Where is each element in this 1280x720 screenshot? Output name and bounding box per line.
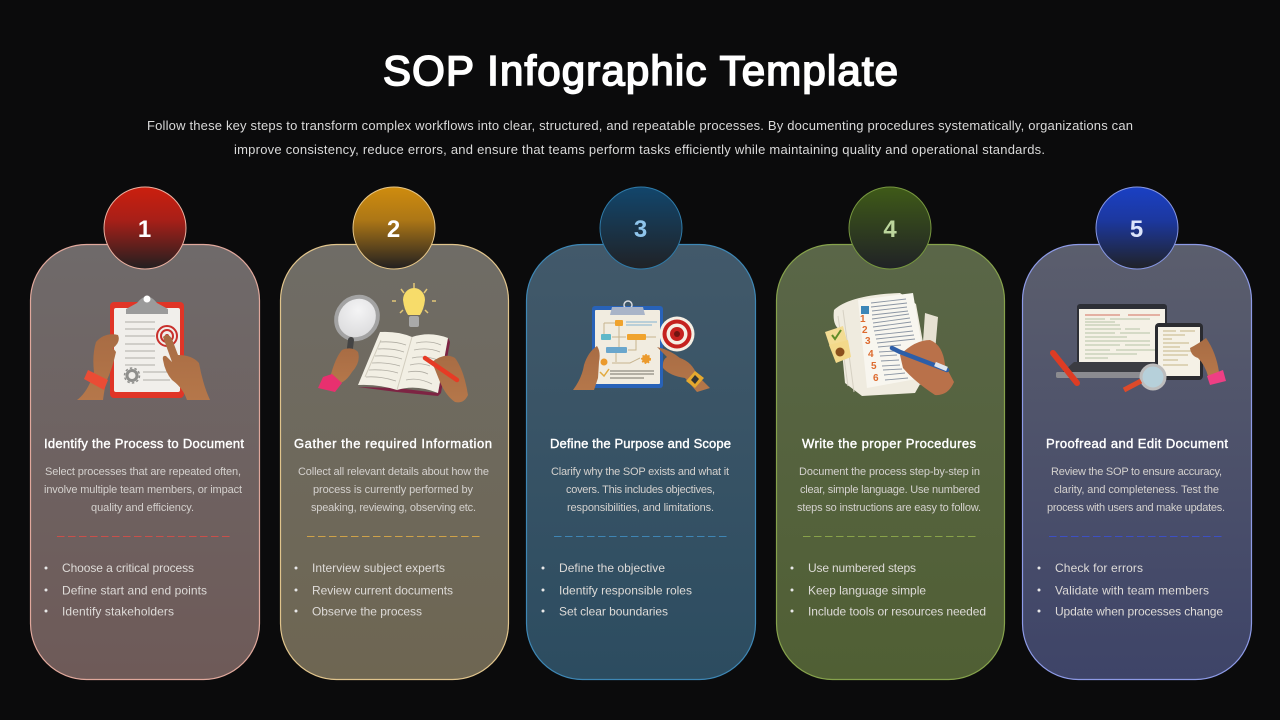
- description: clear, simple language. Use numbered: [800, 484, 980, 496]
- card 1 background: [30, 244, 260, 680]
- heading: Identify the Process to Document: [44, 436, 244, 451]
- number badge 2: [353, 187, 435, 269]
- bullet list: Check for errors: [1055, 561, 1143, 575]
- description: Document the process step-by-step in: [799, 466, 980, 478]
- subtitle text block: [147, 118, 1133, 157]
- number badge 5: [1096, 187, 1178, 269]
- bullet list: Choose a critical process: [62, 561, 194, 575]
- card 5 background: [1022, 244, 1252, 680]
- subtitle text block: Follow these key steps to transform complex workflows into clear, structured, and repeatable processes. By documenting procedures systematically, organizations can: [147, 118, 1133, 133]
- bullet list: Use numbered steps: [808, 561, 916, 575]
- panel: step 2: [280, 187, 508, 680]
- description: responsibilities, and limitations.: [567, 502, 714, 514]
- bullet list: Keep language simple: [808, 584, 926, 598]
- bullet list: [542, 561, 692, 618]
- description: [44, 466, 242, 514]
- divider: [1049, 536, 1223, 538]
- description: covers. This includes objectives,: [566, 484, 715, 496]
- description: [298, 466, 489, 514]
- description: [551, 466, 729, 514]
- bullet list: Include tools or resources needed: [808, 604, 986, 618]
- description: Collect all relevant details about how the: [298, 466, 489, 478]
- number badge 3: 3: [634, 216, 647, 243]
- number badge 5: 5: [1130, 216, 1143, 243]
- divider: [57, 536, 231, 538]
- bullet list: [790, 561, 986, 618]
- divider: [554, 536, 728, 538]
- description: quality and efficiency.: [91, 502, 194, 514]
- card 4 background: [776, 244, 1004, 680]
- description: process is currently performed by: [313, 484, 474, 496]
- description: clarity, and completeness. Test the: [1054, 484, 1219, 496]
- bullet list: [294, 561, 453, 618]
- panel: step 5: [1022, 187, 1252, 680]
- number badge 1: 1: [138, 216, 151, 243]
- bullet list: Review current documents: [312, 584, 453, 598]
- description: steps so instructions are easy to follow.: [797, 502, 981, 514]
- icon: laptop, tablet, magnifier and pen: [1053, 304, 1226, 390]
- card 3 background: [526, 244, 756, 680]
- number badge 4: 4: [883, 216, 897, 243]
- bullet list: Set clear boundaries: [559, 604, 668, 618]
- description: [797, 466, 981, 514]
- description: involve multiple team members, or impact: [44, 484, 242, 496]
- icon: numbered document stack with pen: 2: [862, 325, 868, 336]
- heading: Define the Purpose and Scope: [550, 436, 731, 451]
- heading: Proofread and Edit Document: [1046, 436, 1228, 451]
- card 2 background: [280, 244, 508, 680]
- description: Clarify why the SOP exists and what it: [551, 466, 729, 478]
- bullet list: Define start and end points: [62, 584, 207, 598]
- description: Select processes that are repeated often,: [45, 466, 241, 478]
- description: speaking, reviewing, observing etc.: [311, 502, 476, 514]
- icon: clipboard with target and hands: [77, 296, 210, 400]
- description: [1047, 466, 1225, 514]
- bullet list: Observe the process: [312, 604, 422, 618]
- number badge 3: [600, 187, 682, 269]
- bullet list: [1038, 561, 1223, 618]
- icon: numbered document stack with pen: 3: [865, 336, 871, 347]
- description: Review the SOP to ensure accuracy,: [1051, 466, 1222, 478]
- number badge 4: [849, 187, 931, 269]
- heading: Gather the required Information: [294, 436, 492, 451]
- divider: [803, 536, 977, 538]
- bullet list: [44, 561, 207, 618]
- bullet list: Define the objective: [559, 561, 665, 575]
- bullet list: Update when processes change: [1055, 604, 1223, 618]
- subtitle text block: improve consistency, reduce errors, and ensure that teams perform tasks efficiently while maintaining quality and operational standards.: [234, 142, 1045, 157]
- panel: step 1: [30, 187, 260, 680]
- bullet list: Identify responsible roles: [559, 584, 692, 598]
- icon: book, magnifier, light bulb: [318, 283, 468, 402]
- panel: step 3: [526, 187, 756, 680]
- title: SOP Infographic Template: [383, 47, 898, 94]
- number badge 2: 2: [387, 216, 400, 243]
- icon: numbered document stack with pen: 6: [873, 373, 879, 384]
- divider: [307, 536, 481, 538]
- heading: Write the proper Procedures: [802, 436, 976, 451]
- bullet list: Validate with team members: [1055, 584, 1209, 598]
- icon: numbered document stack with pen: 1: [860, 314, 866, 325]
- panel: step 4: [776, 187, 1004, 680]
- icon: numbered document stack with pen: 4: [868, 349, 874, 360]
- icon: numbered document stack with pen: [825, 293, 954, 396]
- icon: numbered document stack with pen: 5: [871, 361, 877, 372]
- number badge 1: [104, 187, 186, 269]
- bullet list: Interview subject experts: [312, 561, 445, 575]
- bullet list: Identify stakeholders: [62, 604, 174, 618]
- icon: flowchart clipboard with target: [573, 301, 710, 392]
- description: process with users and make updates.: [1047, 502, 1225, 514]
